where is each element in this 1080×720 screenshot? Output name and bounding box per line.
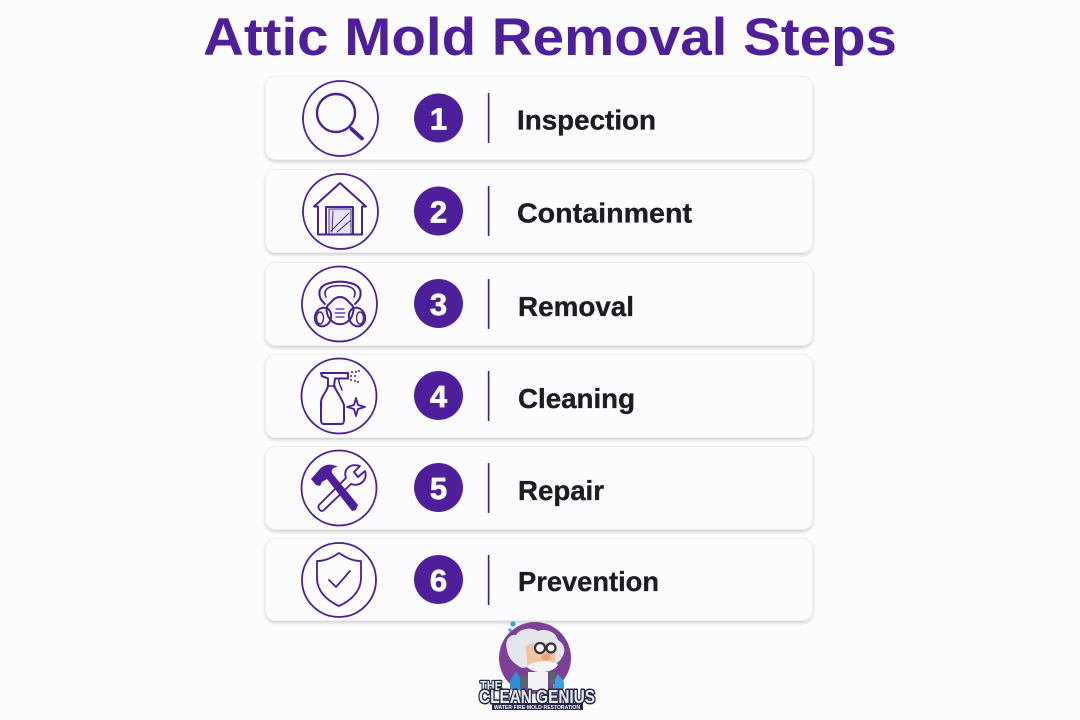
logo: The Clean Genius: WATER·FIRE·MOLD·RESTORATION [494,705,580,711]
step number 1: 1 [430,102,447,136]
step number 2 [414,186,463,236]
step label: Containment [517,198,692,228]
panel: step 3 removal [266,262,812,346]
step label: Inspection [517,104,656,136]
icon: shield with check [302,543,376,617]
step number 6: 6 [430,563,447,598]
step number 2: 2 [430,194,447,230]
panel: step 2 containment [266,170,812,252]
step number 5: 5 [430,471,447,506]
step label: Cleaning [518,383,635,414]
logo: The Clean Genius: THE [480,678,502,693]
icon: spray bottle [302,358,376,434]
step number 5 [414,463,463,512]
panel: step 1 inspection [266,76,812,160]
icon: magnifying glass [303,81,378,156]
step number 6 [414,555,463,604]
icon: hammer and wrench [302,450,376,526]
icon: house with containment sheet [303,174,378,249]
step number 1 [414,94,463,142]
panel: step 6 prevention [266,538,812,620]
logo: The Clean Genius [479,621,595,711]
step number 3: 3 [430,287,447,322]
step label: Prevention [518,566,659,597]
panel: step 5 repair [266,446,812,530]
panel: step 4 cleaning [266,354,812,438]
step number 4 [414,371,463,420]
step label: Removal [518,291,634,322]
step number 3 [414,279,463,328]
icon: respirator mask [302,266,377,342]
title: Attic Mold Removal Steps [203,8,897,67]
logo: The Clean Genius: CLEAN GENIUS [479,687,595,707]
step number 4: 4 [430,379,448,414]
step label: Repair [518,475,604,506]
